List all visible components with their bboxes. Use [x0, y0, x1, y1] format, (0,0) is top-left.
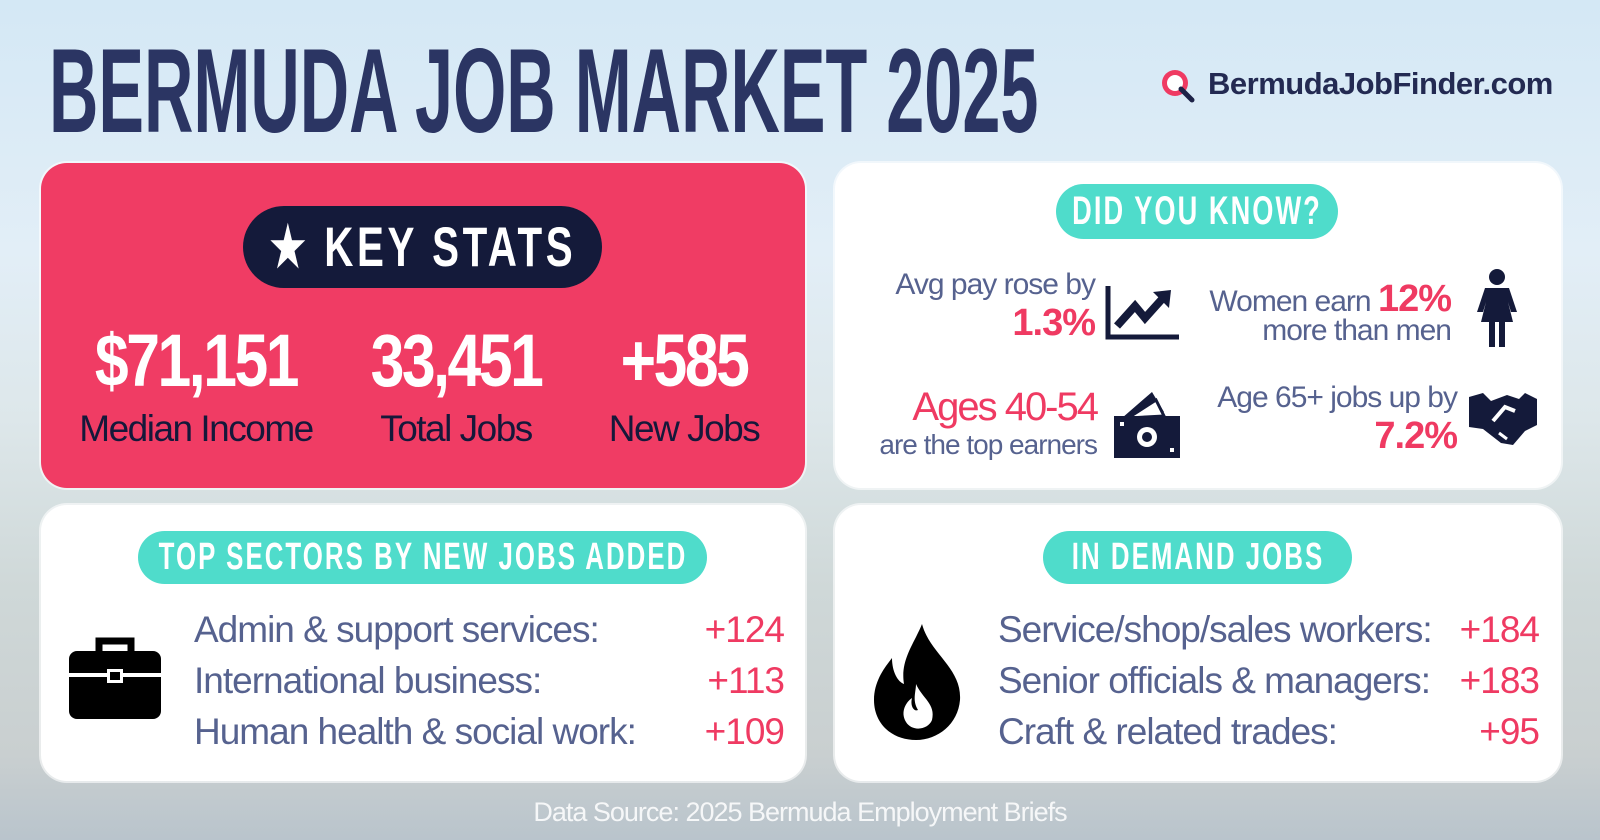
fact: ages 40-54 — [879, 385, 1180, 460]
list: jobs: Senior officials & managers: — [998, 660, 1430, 701]
logo: BermudaJobFinder.com — [1208, 66, 1553, 101]
icon: chart — [1106, 286, 1179, 340]
icon: flame — [874, 624, 960, 740]
fact: avg pay: 1.3% — [1012, 302, 1095, 344]
list: sectors — [194, 609, 784, 752]
list: jobs: +184 — [1460, 609, 1539, 650]
list: jobs — [998, 609, 1539, 752]
stat: new jobs: New Jobs — [609, 408, 759, 449]
stat: median income: $71,151 — [95, 319, 297, 402]
stat: median income — [79, 319, 313, 449]
fact: age 65+: Age 65+ jobs up by — [1217, 381, 1457, 414]
heading pill: key stats — [243, 206, 602, 288]
fact: women earn: Women earn 12% — [1209, 278, 1451, 320]
title: BERMUDA JOB MARKET 2025 — [49, 24, 1038, 158]
footer: data source: Data Source: 2025 Bermuda Employment Briefs — [533, 797, 1067, 827]
list: sectors: International business: — [194, 660, 541, 701]
heading pill: top sectors: TOP SECTORS BY NEW JOBS ADDED — [158, 536, 687, 578]
heading pill: key stats: ★ KEY STATS — [269, 215, 576, 278]
fact: women earn: more than men — [1262, 314, 1451, 347]
list: jobs: Service/shop/sales workers: — [998, 609, 1432, 650]
icon: magnifier — [1162, 70, 1194, 102]
fact: women earn — [1209, 269, 1517, 347]
list: jobs: Craft & related trades: — [998, 711, 1337, 752]
stat: total jobs: 33,451 — [371, 319, 541, 402]
fact: avg pay: Avg pay rose by — [895, 268, 1095, 301]
panel: did you know — [835, 163, 1561, 488]
stat: median income: Median Income — [79, 408, 313, 449]
icon: woman — [1477, 269, 1517, 347]
list: sectors: Admin & support services: — [194, 609, 599, 650]
panel: in demand jobs — [835, 505, 1561, 781]
fact: age 65+ — [1217, 381, 1537, 457]
heading pill: did you know: DID YOU KNOW? — [1072, 189, 1322, 233]
stat: total jobs: Total Jobs — [380, 408, 532, 449]
stat: new jobs: +585 — [621, 319, 747, 402]
stat: total jobs — [371, 319, 542, 449]
fact: avg pay — [895, 268, 1179, 344]
panel: key stats — [41, 163, 805, 488]
icon: money — [1114, 392, 1180, 458]
list: sectors: Human health & social work: — [194, 711, 636, 752]
stat: new jobs — [609, 319, 760, 449]
list: sectors: +113 — [707, 660, 784, 701]
icon: briefcase — [69, 638, 161, 719]
list: jobs: +95 — [1479, 711, 1539, 752]
icon: handshake — [1469, 393, 1537, 445]
fact: ages 40-54: Ages 40-54 — [912, 385, 1097, 429]
panel: top sectors — [41, 505, 805, 781]
fact: ages 40-54: are the top earners — [879, 429, 1097, 460]
list: sectors: +109 — [705, 711, 784, 752]
fact: age 65+: 7.2% — [1374, 415, 1457, 457]
heading pill: in demand — [1043, 531, 1352, 584]
list: sectors: +124 — [705, 609, 784, 650]
heading pill: in demand: IN DEMAND JOBS — [1071, 536, 1324, 578]
list: jobs: +183 — [1460, 660, 1539, 701]
